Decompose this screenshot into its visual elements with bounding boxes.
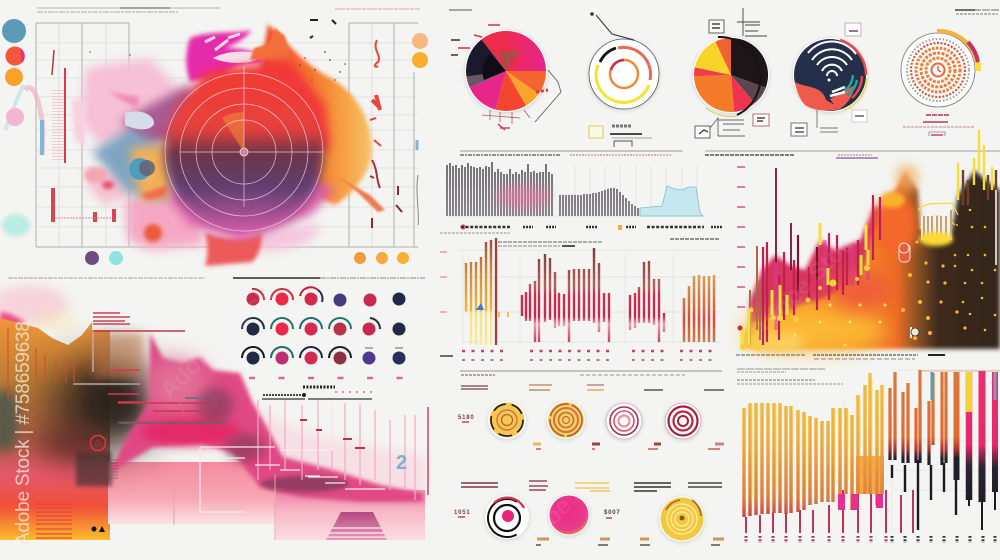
vertical stock caption: Adobe Stock | #758659638 [13,321,34,545]
axis label marks [462,351,716,360]
magenta disc [548,494,590,536]
ring chart 2 [589,12,659,147]
crimson spikes [763,195,880,345]
watermark text [155,221,868,560]
pink haze on bars [495,185,551,209]
dotted radial chart 5 [901,31,981,107]
legend strip [262,387,372,399]
dots row three [242,347,406,364]
bar group B [522,248,609,342]
bottom orange stripes [36,504,72,538]
crimson body behind spikes [750,205,885,340]
grey column bars [447,162,638,216]
orange block behind mid bars [856,456,884,494]
panel: target circles [454,371,724,545]
legend strip [440,225,722,233]
pink caps [838,494,883,510]
captions of stacked bars [736,355,1000,384]
target rose [606,403,642,439]
value labels [454,415,621,516]
bar group A [466,240,491,345]
watermark text: Adobe Stock [155,281,278,404]
value labels: $007 [604,510,621,516]
orange sharp lines top [8,328,74,400]
tiny icon [92,526,105,532]
yellow highlights [742,223,868,349]
target crimson [665,403,701,439]
target yellow [660,496,704,542]
light dots on dark area [794,209,996,346]
panel: tall stacked bars [736,355,1000,543]
dark smoke [0,333,163,486]
pie chart 4 wifi style [793,38,867,112]
ink speckles [89,51,346,81]
header rules [8,8,425,278]
pie 4 labels [791,23,867,136]
small captions [458,422,724,545]
number two: 2 [396,452,407,474]
blue area [640,186,703,216]
pink spray [0,285,79,334]
area silhouette [742,170,1000,349]
pink stems [746,488,913,533]
colour swatch dots [2,19,428,265]
orange to black bars [890,370,946,465]
pie chart 1 [465,30,547,112]
panel: radar splash chart [2,8,428,278]
bar group D [684,275,714,342]
panel: grouped bar chart [440,238,720,360]
pie 3 labels [695,8,769,138]
watermark text: Adobe Stock [745,221,868,344]
yellow nodes [740,265,870,350]
pie chart 3 [693,37,769,116]
pyramid [326,512,387,540]
yellow spikes on dark side [958,130,992,200]
light grid [844,370,1000,530]
grid of grouped bars [460,250,720,345]
panel: orange area spike chart [737,130,1000,352]
panel: gradient landscape [0,285,428,545]
target yellow black [488,401,526,439]
chart captions [440,239,720,356]
chart 5 labels [903,10,1000,136]
y axis ticks [737,167,745,307]
value labels: 1051 [454,510,471,516]
pie 1 annotations [449,10,561,130]
orange left block [0,318,110,540]
left sketch bars [5,50,114,222]
category label marks [746,536,886,543]
panel: column and area chart row [440,151,1000,233]
dot labels [249,377,405,379]
value labels: 5180 [458,415,475,421]
magenta flow [110,333,423,502]
target orange [547,401,585,439]
glow over area [743,164,958,352]
grey smoke stripes [76,460,118,478]
rule above [460,151,1000,158]
dots row one [246,287,406,306]
marker icons on area [738,243,919,338]
radar target [164,66,324,232]
bar group C [630,261,664,342]
spike lines on flow [258,400,415,500]
panel: dot matrix [242,287,406,399]
magenta and black wide bars [966,372,972,500]
dots row two [242,318,406,336]
grey grid behind column chart [446,165,704,216]
section rule [460,371,724,390]
pale pink washes [108,405,425,540]
right sketch marks [310,20,418,228]
watercolor splash [72,24,385,266]
target black pink [481,492,533,544]
orange and yellow bars [744,373,882,517]
red ring marker [90,436,106,450]
grid of splash chart [36,23,418,247]
stripes in smoke [73,313,385,540]
panel: top row circular charts [449,8,1000,147]
